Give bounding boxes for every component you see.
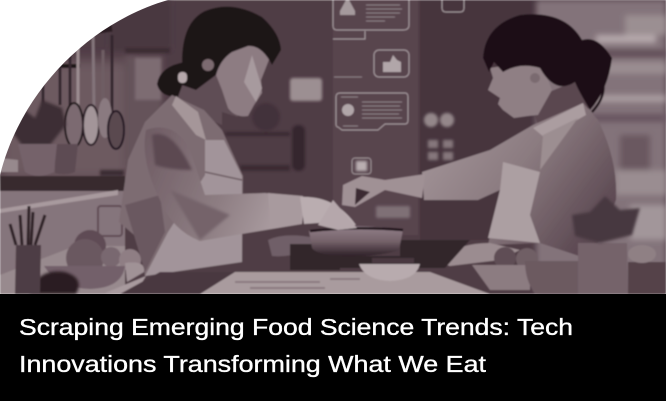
left chef fingers: [318, 200, 357, 230]
face: [214, 42, 272, 116]
plant and pots on shelf: [0, 100, 78, 176]
small bowl: [359, 264, 420, 281]
neck: [536, 81, 590, 123]
recipe card: [333, 0, 409, 39]
dark wall panels: [420, 0, 540, 240]
shirt torso: [119, 95, 243, 276]
glowing lights: [290, 78, 454, 218]
left shelf with plates and bottle: [100, 48, 305, 176]
title bar: [0, 294, 666, 401]
hands: [300, 197, 356, 225]
apron: [145, 140, 242, 276]
pan: [309, 226, 403, 256]
right shelves: [585, 15, 666, 240]
shirt: [422, 103, 616, 258]
stove: [290, 240, 470, 270]
small top card: [442, 0, 464, 12]
kitchen photo: [0, 0, 666, 294]
title: Scraping Emerging Food Science Trends: Tech: [19, 314, 573, 340]
analysis card: [336, 93, 408, 130]
right front bowls and pot: [472, 196, 666, 294]
apron: [488, 162, 540, 243]
left chef sleeve: [145, 128, 305, 241]
hanging utensils: [43, 28, 124, 149]
left chef: [119, 7, 356, 276]
title: [19, 314, 573, 377]
forearm and hand: [342, 174, 425, 207]
neck: [178, 75, 237, 124]
house icon card: [374, 50, 409, 77]
worktop: [200, 272, 490, 294]
lower left cabinets: [0, 190, 126, 275]
right chef: [342, 14, 616, 266]
small glowing card: [352, 158, 371, 174]
hair: [483, 14, 612, 110]
title: Innovations Transforming What We Eat: [19, 351, 487, 377]
utensil cup: [10, 206, 45, 294]
background wall: [0, 0, 666, 294]
face: [488, 60, 552, 118]
ponytail: [156, 62, 183, 97]
hair: [182, 7, 281, 90]
fruit bowl: [30, 230, 146, 294]
holographic UI: [333, 0, 464, 174]
